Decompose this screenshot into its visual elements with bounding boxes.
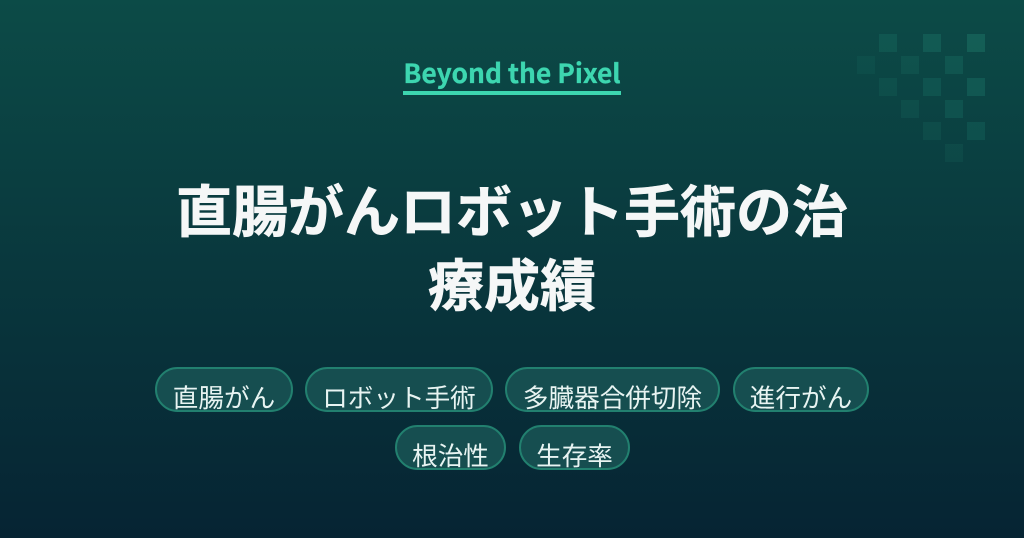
tag: ロボット手術: ロボット手術: [322, 378, 476, 415]
tag: 生存率: [519, 425, 630, 470]
title: 療成績: [428, 242, 596, 323]
tag: 直腸がん: 直腸がん: [173, 378, 275, 415]
tag: 進行がん: 進行がん: [750, 378, 852, 415]
title: 直腸がんロボット手術の治: [176, 168, 848, 249]
tag: 多臓器合併切除: 多臓器合併切除: [523, 378, 702, 415]
tag: ロボット手術: [305, 367, 493, 412]
title: [176, 168, 848, 323]
tag: 多臓器合併切除: [505, 367, 720, 412]
brand label: Beyond the Pixel: [403, 52, 621, 91]
tag: 根治性: [395, 425, 506, 470]
tags: [155, 367, 869, 473]
tag: 生存率: 生存率: [536, 436, 613, 473]
tag: 進行がん: [733, 367, 869, 412]
tag: 根治性: 根治性: [412, 436, 489, 473]
tag: 直腸がん: [155, 367, 293, 412]
decorative pixel pattern: [879, 34, 985, 162]
